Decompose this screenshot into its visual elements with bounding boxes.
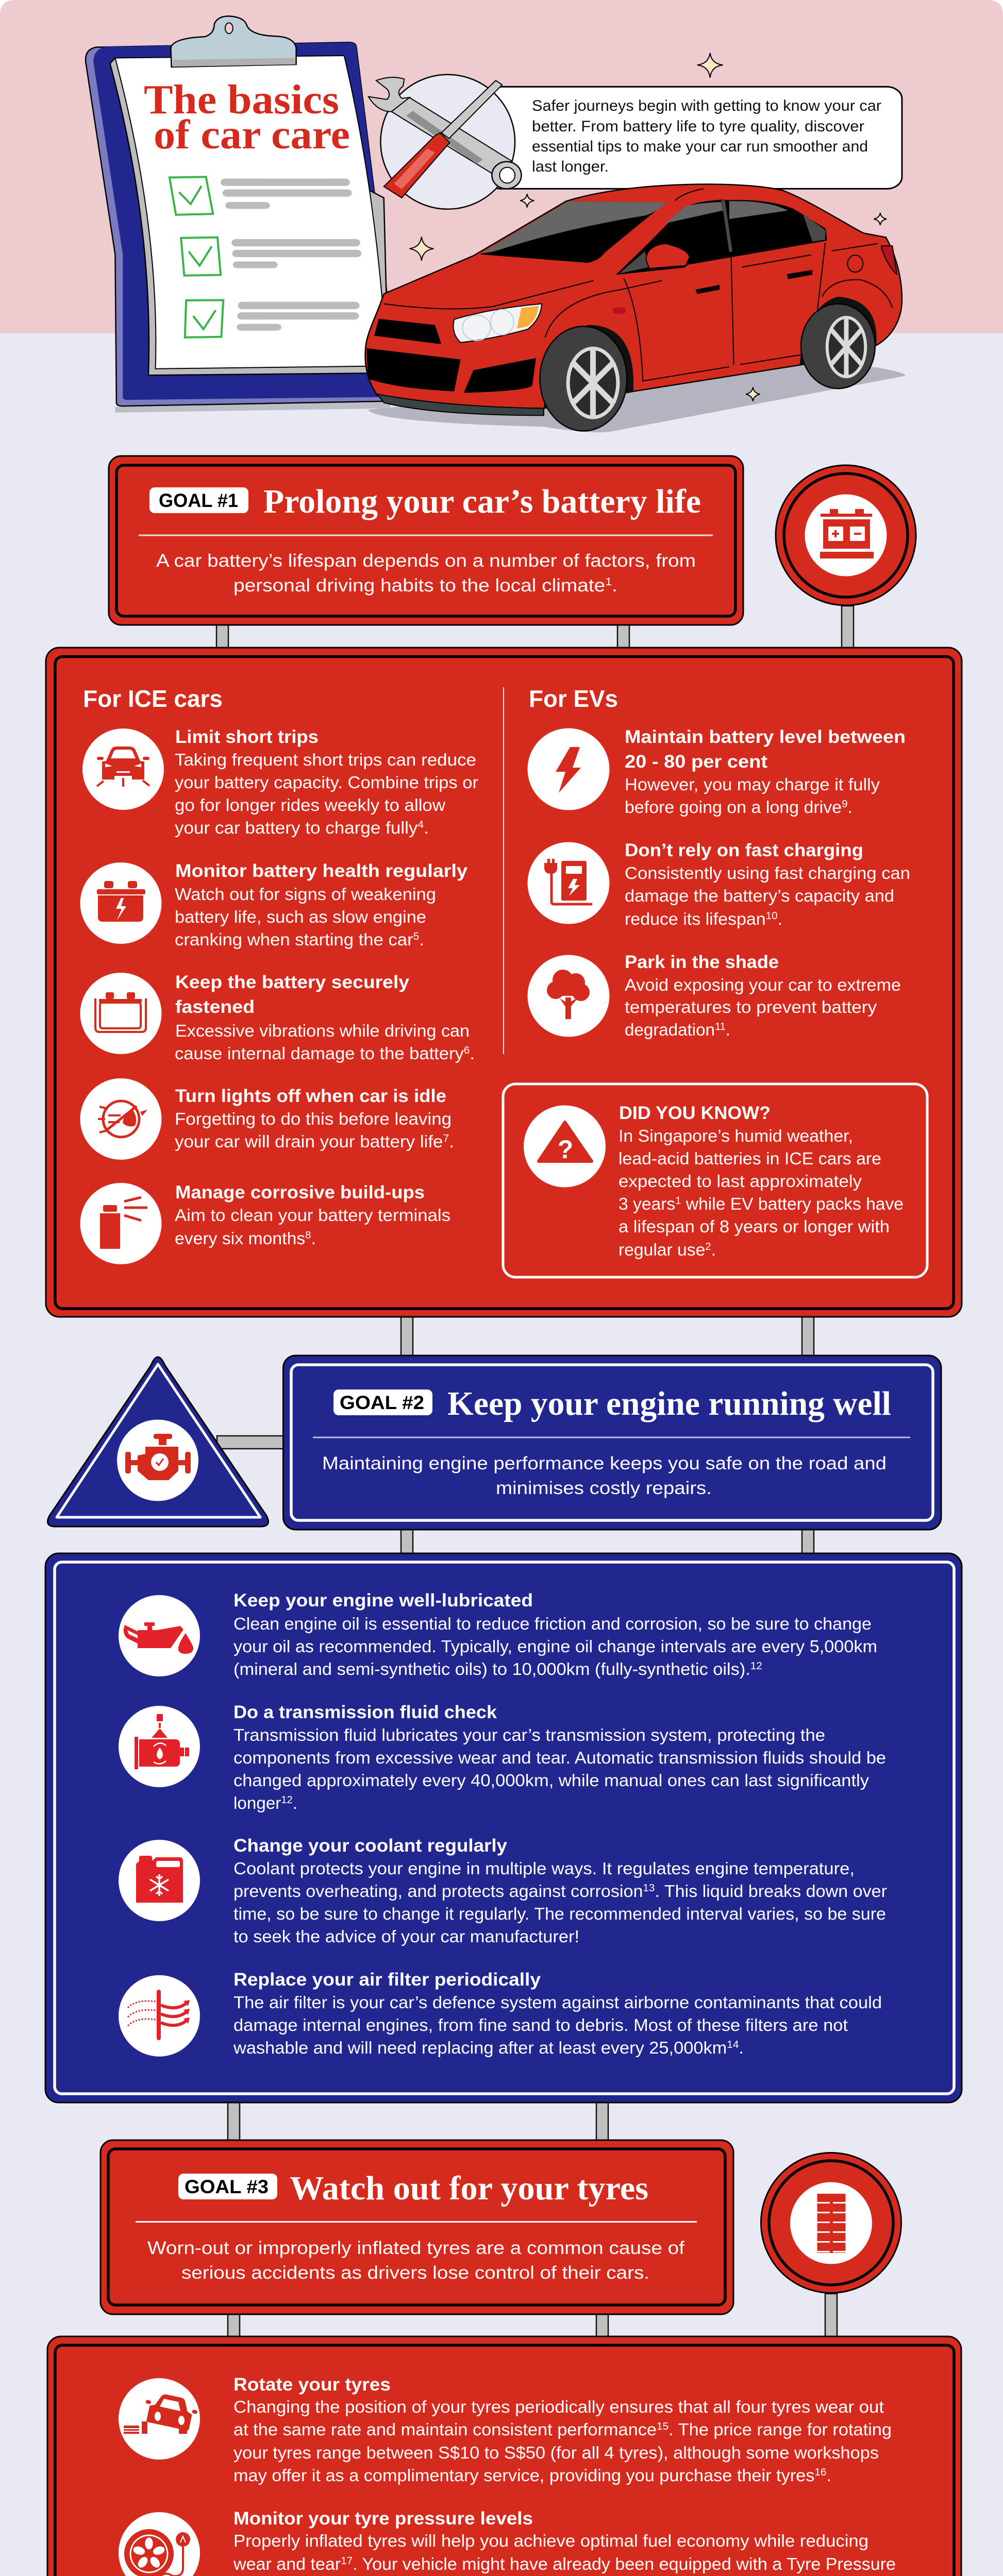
panel: goal 1 sign bbox=[109, 456, 743, 625]
tip: keep battery fastened bbox=[80, 972, 475, 1063]
callout: did you know: while EV battery packs have bbox=[681, 1194, 904, 1213]
tip: monitor battery health: battery life, such as slow engine bbox=[175, 907, 426, 926]
tip: engine oil: 12 bbox=[750, 1660, 762, 1672]
tip: transmission fluid: Do a transmission fluid check bbox=[233, 1702, 497, 1722]
goal description bbox=[147, 2238, 684, 2283]
tip: tyre pressure: wear and tear bbox=[233, 2554, 338, 2573]
tip: coolant: to seek the advice of your car manufacturer! bbox=[233, 1927, 579, 1946]
tip: air filter: 14 bbox=[727, 2039, 739, 2050]
tip: fast charging: 10 bbox=[766, 910, 778, 922]
tip: manage corrosive build-ups: Manage corrosive build-ups bbox=[175, 1182, 425, 1202]
tip: park in the shade: degradation bbox=[625, 1020, 714, 1039]
tip: limit short trips: 4 bbox=[417, 819, 424, 831]
goal description bbox=[322, 1453, 887, 1498]
tip: maintain battery level: 20 - 80 per cent bbox=[625, 752, 767, 772]
hero illustration bbox=[86, 16, 905, 432]
title: of car care bbox=[154, 112, 350, 158]
sign poles bbox=[216, 606, 854, 2336]
callout: did you know: a lifespan of 8 years or longer with bbox=[618, 1217, 890, 1236]
icon: car on jack bbox=[119, 2378, 200, 2460]
goal description: . bbox=[612, 575, 617, 596]
callout: did you know: 2 bbox=[705, 1241, 711, 1252]
tip: tyre pressure bbox=[119, 2509, 896, 2576]
callout: did you know: . bbox=[711, 1240, 716, 1259]
tip: rotate tyres: . The price range for rotating bbox=[668, 2420, 892, 2439]
icon: oil can bbox=[119, 1595, 200, 1676]
heading: for ICE cars: For ICE cars bbox=[83, 685, 223, 712]
tip: fast charging: damage the battery’s capacity and bbox=[625, 886, 894, 905]
goal badge: GOAL #1 bbox=[159, 490, 238, 511]
tip: fast charging: . bbox=[778, 909, 782, 928]
tip: rotate tyres: Changing the position of your tyres periodically ensures that all four tyres wear out bbox=[233, 2397, 884, 2416]
tip: manage corrosive build-ups: 8 bbox=[305, 1230, 311, 1241]
goal description: serious accidents as drivers lose control of their cars. bbox=[181, 2263, 649, 2283]
panel: goal 2 sign bbox=[283, 1355, 941, 1530]
goal description: Maintaining engine performance keeps you safe on the road and bbox=[322, 1453, 887, 1473]
intro text: better. From battery life to tyre quality, discover bbox=[532, 118, 864, 135]
goal description: personal driving habits to the local climate bbox=[233, 575, 569, 596]
tip: monitor battery health bbox=[80, 861, 468, 949]
tip: monitor battery health: . bbox=[419, 930, 424, 949]
tip: turn lights off: . bbox=[449, 1132, 454, 1151]
icon: battery with bolt bbox=[80, 862, 162, 944]
tip: monitor battery health: Watch out for signs of weakening bbox=[175, 885, 436, 904]
icon: tyre and gauge bbox=[119, 2512, 200, 2576]
tip: maintain battery level: . bbox=[848, 798, 852, 817]
tip: tyre pressure: Monitor your tyre pressure levels bbox=[233, 2509, 533, 2529]
intro text: essential tips to make your car run smoother and bbox=[532, 138, 868, 155]
callout: did you know: 3 years bbox=[618, 1194, 674, 1213]
goal badge bbox=[149, 487, 248, 513]
tip: manage corrosive build-ups: Aim to clean your battery terminals bbox=[175, 1206, 450, 1225]
tip: maintain battery level bbox=[528, 727, 906, 817]
icon: sparkles bbox=[409, 53, 887, 401]
goal description: Worn-out or improperly inflated tyres are a common cause of bbox=[147, 2238, 684, 2258]
callout: did you know: DID YOU KNOW? bbox=[619, 1103, 771, 1123]
tip: coolant: prevents overheating, and protects against corrosion bbox=[233, 1882, 630, 1901]
tip: coolant: time, so be sure to change it regularly. The recommended interval varies, so be sure bbox=[233, 1904, 886, 1923]
tip: rotate tyres: may offer it as a complimentary service, providing you purchase their tyres bbox=[233, 2466, 793, 2485]
intro text: last longer. bbox=[532, 158, 609, 175]
callout: did you know: regular use bbox=[618, 1240, 704, 1259]
tip: transmission fluid: . bbox=[293, 1793, 297, 1812]
tip: turn lights off: 7 bbox=[443, 1133, 449, 1144]
goal badge bbox=[178, 2174, 277, 2199]
panel: tyre tips bbox=[47, 2336, 961, 2576]
checklist boxes and lines bbox=[170, 177, 361, 337]
tip: engine oil: (mineral and semi-synthetic oils) to 10,000km (fully-synthetic oils). bbox=[233, 1659, 730, 1679]
icon: tyre tread round sign bbox=[761, 2153, 901, 2293]
tip: manage corrosive build-ups: . bbox=[311, 1229, 316, 1248]
title: The basics bbox=[144, 77, 339, 123]
tip: limit short trips: . bbox=[424, 818, 429, 837]
icon: air filter bbox=[119, 1975, 200, 2057]
tip: air filter: The air filter is your car’s defence system against airborne contaminants that could bbox=[233, 1993, 882, 2012]
goal description: minimises costly repairs. bbox=[496, 1478, 712, 1498]
goal badge bbox=[333, 1389, 432, 1415]
tip: keep battery fastened: . bbox=[470, 1044, 475, 1063]
tip: engine oil: Keep your engine well-lubricated bbox=[233, 1590, 533, 1611]
tip: rotate tyres: 15 bbox=[657, 2421, 668, 2432]
tip: fast charging bbox=[528, 840, 910, 928]
tip: transmission fluid: 12 bbox=[281, 1794, 293, 1806]
icon: charging station bbox=[528, 842, 609, 924]
title bbox=[144, 77, 350, 158]
tip: air filter bbox=[119, 1970, 882, 2057]
tip: coolant bbox=[119, 1836, 887, 1946]
icon: warning triangle: ? bbox=[558, 1135, 573, 1164]
tip: maintain battery level: 9 bbox=[842, 799, 848, 810]
heading: Watch out for your tyres bbox=[290, 2170, 648, 2207]
tip: transmission fluid: components from excessive wear and tear. Automatic transmission fluids should be bbox=[233, 1748, 886, 1767]
tip: coolant: 13 bbox=[643, 1883, 655, 1894]
tip: maintain battery level: However, you may charge it fully bbox=[625, 775, 880, 794]
tip: monitor battery health: cranking when starting the car bbox=[175, 930, 402, 949]
illustration: red car bbox=[365, 184, 902, 431]
icon: engine triangle sign bbox=[47, 1357, 269, 1527]
tip: keep battery fastened: 6 bbox=[464, 1045, 470, 1056]
tip: tyre pressure: 17 bbox=[341, 2555, 353, 2567]
tip: park in the shade: 11 bbox=[715, 1021, 726, 1032]
callout: did you know bbox=[503, 1084, 927, 1277]
tip: engine oil: Clean engine oil is essential to reduce friction and corrosion, so be sure to change bbox=[233, 1614, 872, 1633]
callout: did you know: 1 bbox=[675, 1195, 681, 1207]
goal badge: GOAL #3 bbox=[185, 2176, 269, 2197]
tip: park in the shade bbox=[528, 952, 901, 1039]
goal description: 1 bbox=[605, 576, 612, 588]
tip: turn lights off: your car will drain your battery life bbox=[175, 1132, 428, 1151]
tip: park in the shade: . bbox=[726, 1020, 730, 1039]
tip: tyre pressure: Properly inflated tyres will help you achieve optimal fuel economy while reducing bbox=[233, 2531, 868, 2550]
icon: clipboard bbox=[86, 16, 390, 413]
text bubble shape bbox=[486, 87, 902, 189]
tip: keep battery fastened: Excessive vibrations while driving can bbox=[175, 1021, 470, 1040]
icon: lightning bolt bbox=[528, 728, 609, 810]
icon: tree bbox=[528, 955, 609, 1037]
tip: coolant: . This liquid breaks down over bbox=[655, 1882, 887, 1901]
tip: keep battery fastened: cause internal damage to the battery bbox=[175, 1044, 451, 1063]
panel: engine tips bbox=[45, 1553, 962, 2103]
goal badge: GOAL #2 bbox=[340, 1392, 424, 1413]
tip: limit short trips: your battery capacity. Combine trips or bbox=[175, 773, 478, 792]
tip: coolant: Change your coolant regularly bbox=[233, 1836, 508, 1856]
icon: battery in bracket bbox=[80, 973, 162, 1054]
tip: turn lights off: Turn lights off when car is idle bbox=[175, 1086, 446, 1106]
goal description bbox=[156, 551, 696, 596]
tip: air filter: damage internal engines, from fine sand to debris. Most of these filters are not bbox=[233, 2015, 848, 2035]
tip: manage corrosive build-ups bbox=[80, 1182, 450, 1264]
goal description: A car battery’s lifespan depends on a number of factors, from bbox=[156, 551, 696, 571]
tip: rotate tyres: Rotate your tyres bbox=[233, 2375, 391, 2395]
tip: engine oil: your oil as recommended. Typically, engine oil change intervals are every 5,000km bbox=[233, 1637, 877, 1656]
tip: coolant: Coolant protects your engine in multiple ways. It regulates engine temperature, bbox=[233, 1859, 855, 1878]
tip: tyre pressure: . Your vehicle might have already been equipped with a Tyre Pressure bbox=[353, 2554, 896, 2573]
tip: rotate tyres: . bbox=[826, 2466, 831, 2485]
heading: Keep your engine running well bbox=[447, 1385, 891, 1422]
tip: transmission fluid: longer bbox=[233, 1793, 281, 1812]
tip: transmission fluid bbox=[119, 1702, 886, 1812]
callout: did you know: In Singapore’s humid weather, bbox=[618, 1126, 853, 1145]
icon: warning triangle bbox=[524, 1106, 606, 1187]
icon: battery round sign bbox=[776, 465, 916, 605]
heading: Prolong your car’s battery life bbox=[263, 483, 701, 520]
tip: limit short trips bbox=[82, 727, 478, 837]
hero background bbox=[0, 0, 1003, 333]
tip: keep battery fastened: fastened bbox=[175, 997, 255, 1017]
tip: turn lights off: Forgetting to do this before leaving bbox=[175, 1109, 452, 1128]
tip: rotate tyres: at the same rate and maintain consistent performance bbox=[233, 2420, 640, 2439]
icon: car front bbox=[82, 728, 164, 810]
icon: coolant can bbox=[119, 1840, 200, 1921]
tip: monitor battery health: Monitor battery health regularly bbox=[175, 861, 468, 881]
panel: battery tips bbox=[46, 648, 962, 1317]
tip: park in the shade: temperatures to prevent battery bbox=[625, 997, 877, 1016]
tip: rotate tyres: your tyres range between S$10 to S$50 (for all 4 tyres), although some workshops bbox=[233, 2443, 879, 2462]
tip: keep battery fastened: Keep the battery securely bbox=[175, 972, 410, 992]
heading: for EVs: For EVs bbox=[529, 685, 618, 712]
tip: air filter: Replace your air filter periodically bbox=[233, 1970, 541, 1990]
icon: spray can bbox=[80, 1183, 162, 1264]
tip: manage corrosive build-ups: every six months bbox=[175, 1229, 303, 1248]
tip: engine oil bbox=[119, 1590, 877, 1679]
tip: maintain battery level: Maintain battery level between bbox=[625, 727, 906, 747]
panel: goal 3 sign bbox=[101, 2140, 733, 2314]
tip: turn lights off bbox=[80, 1078, 454, 1160]
tip: transmission fluid: Transmission fluid lubricates your car’s transmission system, protecting the bbox=[233, 1725, 825, 1744]
tip: transmission fluid: changed approximately every 40,000km, while manual ones can last significantly bbox=[233, 1771, 870, 1790]
icon: crossed tools bbox=[369, 75, 521, 209]
intro text bbox=[532, 97, 881, 175]
callout: did you know: lead-acid batteries in ICE cars are bbox=[618, 1149, 881, 1168]
tip: fast charging: Consistently using fast charging can bbox=[625, 863, 910, 883]
tip: maintain battery level: before going on a long drive bbox=[625, 798, 835, 817]
tip: limit short trips: go for longer rides weekly to allow bbox=[175, 795, 445, 815]
intro text: Safer journeys begin with getting to know your car bbox=[532, 97, 881, 114]
tip: limit short trips: Limit short trips bbox=[175, 727, 319, 747]
icon: headlight off bbox=[80, 1078, 162, 1160]
tip: limit short trips: Taking frequent short trips can reduce bbox=[175, 750, 476, 769]
icon: transmission bbox=[119, 1706, 200, 1787]
tip: monitor battery health: 5 bbox=[413, 931, 419, 942]
callout: did you know: expected to last approximately bbox=[618, 1172, 862, 1191]
tip: park in the shade: Avoid exposing your car to extreme bbox=[625, 975, 901, 994]
tip: rotate tyres: 16 bbox=[814, 2467, 826, 2478]
tip: rotate tyres bbox=[119, 2375, 892, 2485]
tip: park in the shade: Park in the shade bbox=[625, 952, 779, 972]
car ground shadow bbox=[368, 365, 905, 432]
tip: limit short trips: your car battery to charge fully bbox=[175, 818, 404, 837]
tip: air filter: washable and will need replacing after at least every 25,000km bbox=[233, 2038, 707, 2057]
tip: air filter: . bbox=[739, 2038, 744, 2057]
tip: fast charging: Don’t rely on fast charging bbox=[625, 840, 863, 860]
tip: fast charging: reduce its lifespan bbox=[625, 909, 762, 928]
